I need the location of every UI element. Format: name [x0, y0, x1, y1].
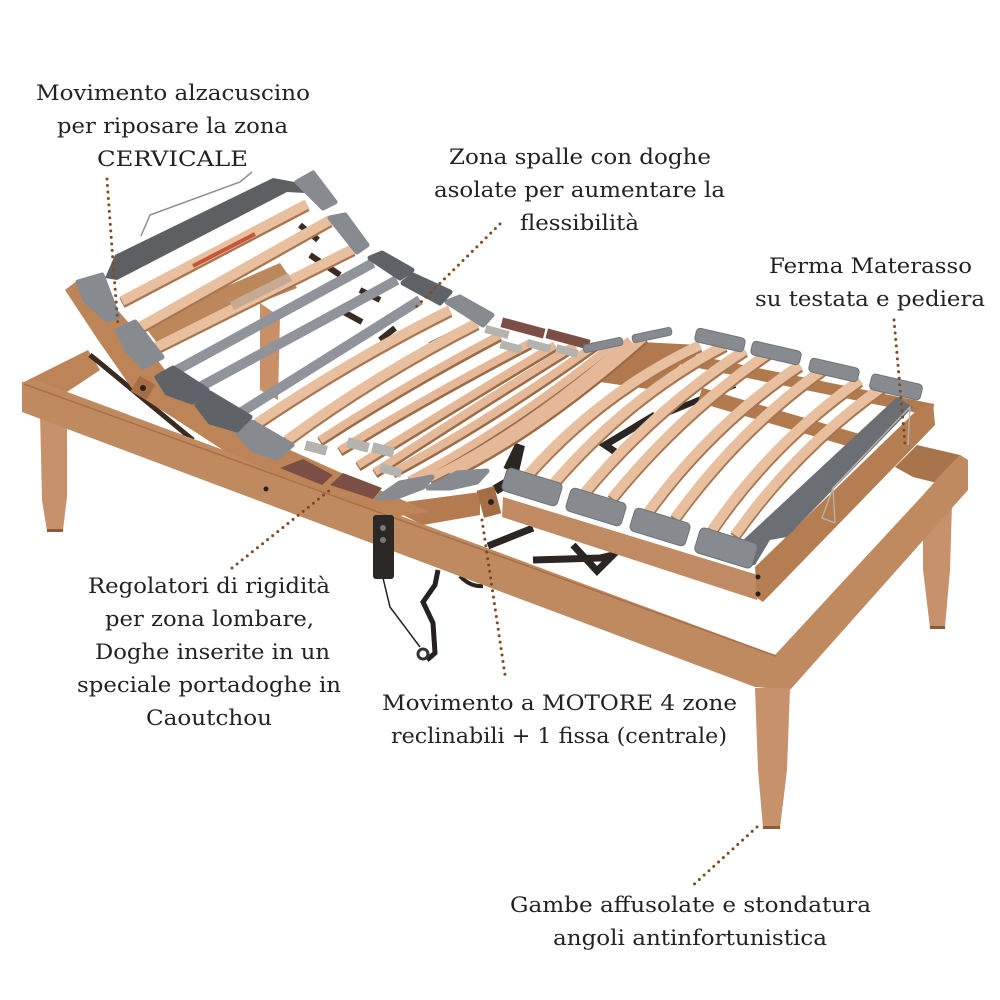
text: movimento alzacuscino: CERVICALE [97, 147, 248, 171]
leader line: motore [482, 520, 505, 675]
head pads dark [157, 253, 450, 430]
text: regolatori di rigidità: speciale portadoghe in [77, 673, 341, 697]
central wedge [383, 492, 480, 525]
hinge joints [131, 376, 501, 518]
text: zona spalle [434, 145, 725, 235]
right section slats shadow [525, 347, 885, 537]
base frame front rail [22, 380, 790, 690]
text: movimento a motore: Movimento a MOTORE 4 zone [382, 691, 737, 715]
base frame back rails [22, 350, 968, 483]
central grey pads [378, 327, 672, 498]
front rail shadow line [24, 384, 776, 656]
right section back pads [694, 328, 923, 401]
head grey top band [105, 178, 305, 280]
text: ferma materasso [755, 254, 985, 311]
text: gambe affusolate: Gambe affusolate e stondatura [510, 893, 871, 917]
text: movimento alzacuscino: Movimento alzacuscino [36, 81, 310, 105]
right section end rail [755, 403, 935, 602]
base frame right rail [775, 455, 968, 690]
text: movimento alzacuscino: per riposare la zona [57, 114, 288, 138]
hinge and rail bolts [140, 385, 760, 596]
text: zona spalle: Zona spalle con doghe [449, 145, 711, 169]
text: movimento a motore [382, 691, 737, 748]
head wire stop [141, 172, 252, 236]
central curved slats [320, 335, 645, 480]
grey flexible slats [177, 263, 420, 413]
text: regolatori di rigidità: Doghe inserite in un [95, 640, 330, 664]
text: movimento a motore: reclinabili + 1 fissa (centrale) [391, 724, 727, 748]
leader line: cervicale [107, 179, 118, 325]
right section slats [525, 345, 885, 535]
head under-structure [90, 225, 460, 440]
text: zona spalle: asolate per aumentare la [434, 178, 725, 202]
back legs [40, 412, 952, 628]
bed illustration [22, 172, 968, 829]
right section side rail [502, 497, 758, 600]
lumbar curved slats shadow [257, 312, 477, 442]
text: zona spalle: flessibilità [520, 211, 639, 235]
text: ferma materasso: su testata e pediera [755, 287, 985, 311]
foot grey band [740, 397, 913, 565]
front right leg [755, 688, 790, 828]
lumbar curved slats [257, 310, 477, 440]
head wood brace [142, 263, 297, 343]
text: regolatori di rigidità: Caoutchou [146, 706, 272, 730]
text: regolatori di rigidità: Regolatori di rigidità [88, 574, 330, 598]
lumbar Caoutchou pads [280, 317, 591, 499]
text: gambe affusolate [510, 893, 871, 950]
leader line: ferma materasso [894, 320, 905, 444]
head wooden support post [260, 303, 280, 400]
leader line: spalle [415, 224, 500, 308]
head metal plate [232, 277, 290, 306]
head side rail [65, 280, 430, 516]
text: regolatori di rigidità: per zona lombare, [105, 607, 314, 631]
leader line: gambe [690, 827, 757, 888]
foot wire stop [822, 407, 910, 523]
right section back cross rails [600, 342, 933, 442]
central curved slats shadow [320, 337, 645, 482]
text: gambe affusolate: angoli antinfortunistica [553, 926, 827, 950]
head wood slats [122, 204, 353, 348]
remote control [373, 515, 438, 660]
leader line: rigidità [232, 490, 330, 568]
right section front pads [501, 467, 758, 569]
lumbar small adjusters [304, 325, 579, 478]
text: regolatori di rigidità [77, 574, 341, 730]
head label ERGONOMICA [193, 234, 255, 266]
text: ferma materasso: Ferma Materasso [769, 254, 972, 278]
motor mechanism arms [460, 385, 735, 586]
leg tips [47, 529, 945, 829]
head wood slats shadow [122, 206, 353, 350]
head pads light [78, 173, 492, 458]
text: movimento alzacuscino [36, 81, 310, 171]
